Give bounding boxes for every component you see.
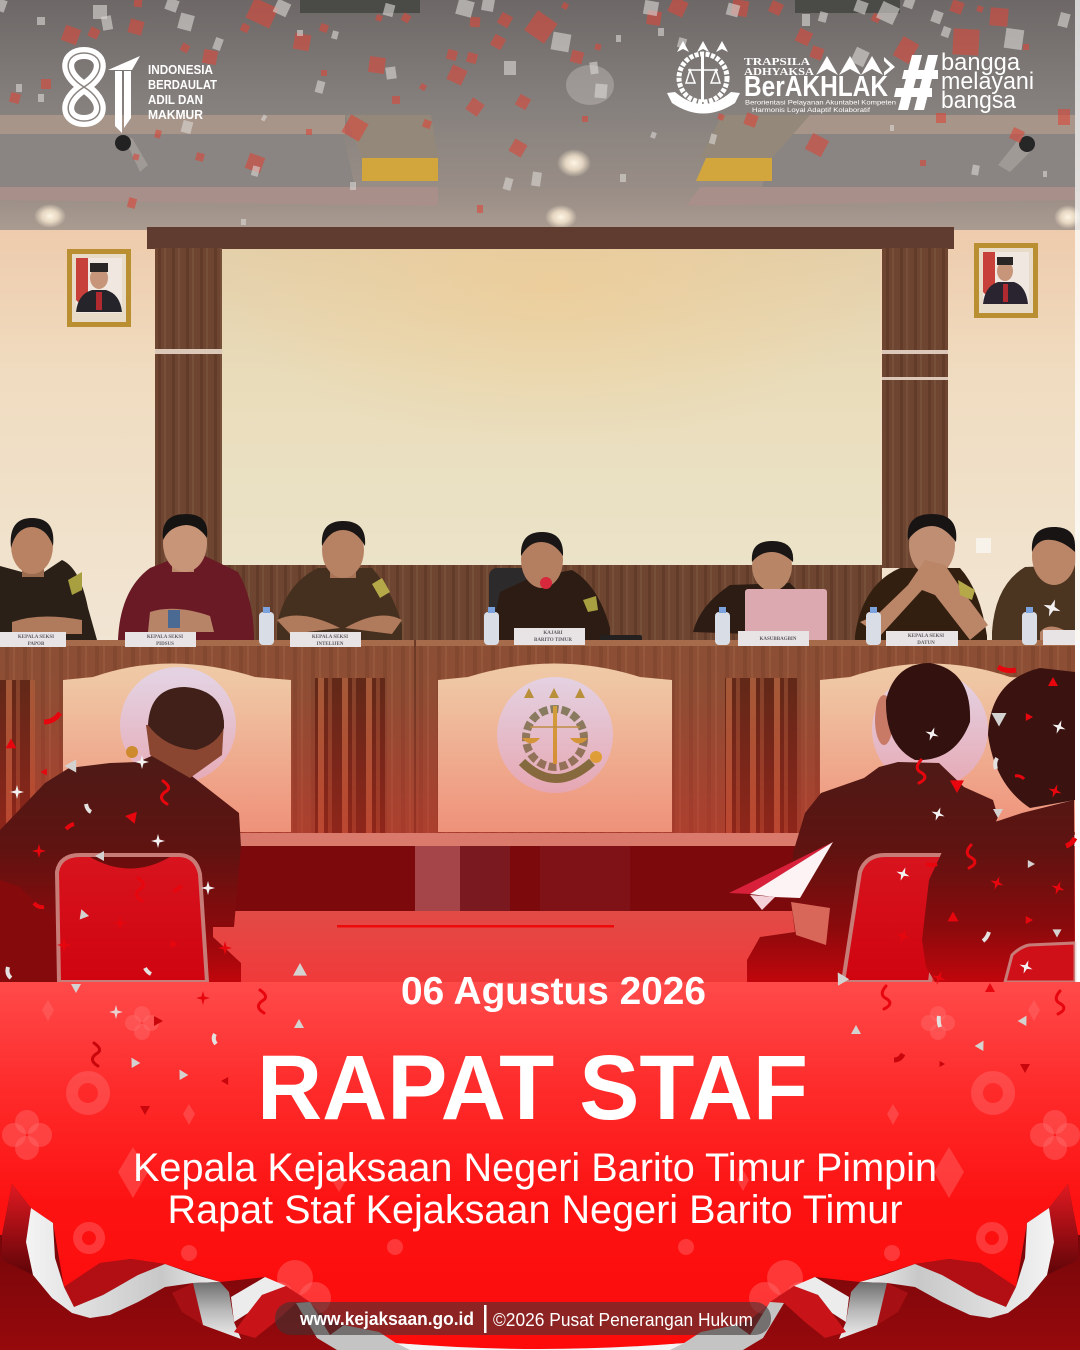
banner background [0,982,1080,1350]
name plates: KASUBBAGBIN [760,637,797,642]
name plates: KEPALA SEKSI [908,634,944,639]
ornament: swirl left [66,1071,110,1115]
logo: 81 anniversary [68,53,217,133]
right edge strip [1075,0,1080,982]
wood frame [147,227,954,568]
name plates: DATUN [917,641,935,646]
footer website: www.kejaksaan.go.id [299,1309,474,1329]
portrait left [67,249,131,327]
side walls [0,230,1080,640]
official 6 [855,514,988,640]
footer bar [275,1302,771,1335]
official 5 [693,541,806,636]
table [0,640,1075,846]
projector screen [222,249,880,565]
wood wainscot [222,565,882,643]
laptop [745,589,827,643]
confetti: squiggles [92,760,1064,1066]
logo: berakhlak: BerAKHLAK [744,71,888,103]
logo tagline: INDONESIA [148,62,214,77]
chair right [843,855,945,982]
hashtag words: bangsa [941,87,1017,114]
logo: berakhlak: Berorientasi Pelayanan Akuntabel Kompeten [745,100,896,106]
name plates: KEPALA SEKSI [147,635,183,640]
chair far right [1005,943,1075,982]
subtitle: Rapat Staf Kejaksaan Negeri Barito Timur [168,1188,902,1232]
audience member far right [922,668,1075,982]
title: RAPAT STAF [257,1037,808,1139]
hashtag words: bangga [941,49,1021,76]
red tint on table [0,640,1075,845]
name plates: INTELIJEN [317,642,344,647]
name plates: BARITO TIMUR [534,638,572,643]
ornament: knot upper right [921,1006,955,1040]
ceiling panels [0,0,1080,229]
ornament: knot right [1030,1110,1080,1160]
logo: berakhlak [744,56,896,114]
confetti: lower [6,596,1075,1115]
confetti: red triangles [6,677,1058,992]
confetti: grey triangles [64,713,1062,1080]
banner red field [0,982,1080,1349]
confetti: sparkles [10,596,1068,1019]
ornament: small swirl left [73,1222,105,1254]
name plates [0,628,1075,647]
subtitle [133,1146,937,1232]
ceiling [0,0,1080,232]
table slats [0,678,797,835]
logo tagline: ADIL DAN [148,92,203,107]
floor [0,846,1075,982]
panel officials [0,514,1076,643]
official 3 [277,521,402,640]
ribbon right [670,1184,1078,1350]
red accent line [337,925,614,928]
chair left [57,855,207,982]
logo: berakhlak: ADHYAKSA [744,66,814,78]
ornament: leaves [42,1000,1040,1198]
official 7 [992,527,1076,640]
portrait right [974,243,1038,318]
ornament: knot left [2,1110,52,1160]
confetti: curls [34,667,1075,1060]
name plates: PAPOB [28,642,45,647]
hashtag words: melayani [941,68,1034,95]
hashtag words [941,49,1034,114]
confetti: red stars [32,782,1067,1005]
plinth [232,833,802,846]
logo: berakhlak: Harmonis Loyal Adaptif Kolaboratif [752,107,870,114]
logo tagline [148,62,217,122]
hash mark [894,55,938,110]
confetti: dark red bits on banner [140,1016,1030,1115]
footer copyright: ©2026 Pusat Penerangan Hukum [493,1310,753,1330]
batik ornaments [2,1000,1080,1314]
logo tagline: BERDAULAT [148,77,217,92]
paper plane [729,842,833,910]
ornament: swirl right [971,1071,1015,1115]
emblem medallions [120,667,988,793]
confetti: top [0,0,1071,225]
confetti: grey curls [7,758,997,1044]
name plates: KEPALA SEKSI [312,635,348,640]
name plates: KEPALA SEKSI [18,635,54,640]
audience seated [0,663,1075,982]
logo: kejaksaan emblem [667,41,740,114]
ribbon left [2,1184,410,1350]
logo: bangga melayani bangsa [894,49,1034,114]
audience member right [747,663,998,982]
ornament: knot upper left [125,1006,159,1040]
name plates: PIDSUS [156,642,174,647]
date: 06 Agustus 2026 [401,970,706,1013]
subtitle: Kepala Kejaksaan Negeri Barito Timur Pimpin [133,1146,937,1190]
logo tagline: MAKMUR [148,107,204,122]
official 2 [118,514,254,640]
logo: berakhlak: TRAPSILA [744,56,810,68]
water bottles [259,607,1037,645]
footer divider [484,1305,486,1333]
official 1 [0,518,97,640]
ornament: small swirl right [976,1222,1008,1254]
logo mark [68,53,140,133]
banner white edge [396,1343,684,1350]
wall switch [976,538,991,553]
official 4 [489,532,642,642]
ornament: lower big knots [267,1260,813,1314]
name plates: KAJARI [543,631,563,636]
ornament: small knots [181,1239,900,1261]
audience member left [0,687,241,982]
table panels [63,664,1075,832]
